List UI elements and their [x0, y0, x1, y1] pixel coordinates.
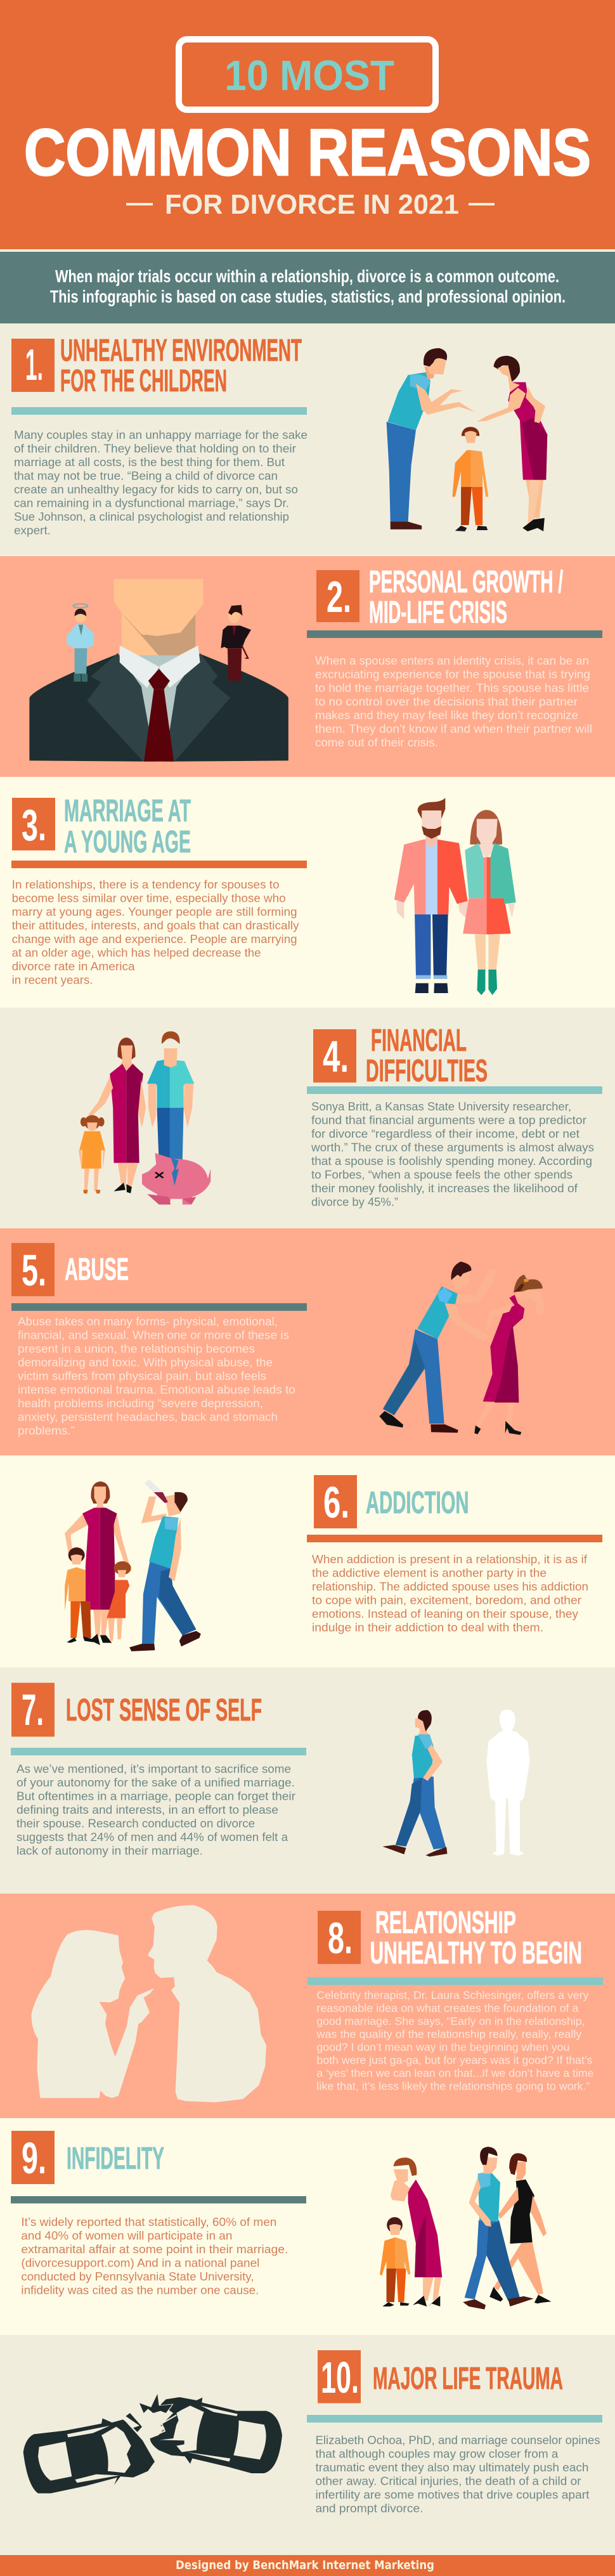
heading: MID-LIFE CRISIS [369, 595, 507, 630]
badge: 10 most: 10 MOST [224, 52, 394, 100]
panel: reason 2 [0, 556, 615, 777]
text block: conducted by Pennsylvania State University, [21, 2270, 254, 2283]
text block: indulge in their addiction to deal with them. [312, 1621, 543, 1634]
number badge 2 [316, 570, 359, 622]
panel: reason 1 [0, 323, 615, 556]
text block: suggests that 24% of men and 44% of women felt a [16, 1830, 288, 1844]
text block: can remaining in a dysfunctional marriage,” says Dr. [14, 496, 289, 510]
number badge 8 [318, 1911, 361, 1964]
text block [12, 878, 299, 987]
heading [369, 565, 563, 630]
text block: divorce rate in America [12, 959, 135, 973]
illustration: infidelity family scene [380, 2147, 551, 2310]
text block: their money foolishly, it increases the likelihood of [311, 1181, 578, 1195]
number badge 9: 9. [22, 2133, 46, 2183]
text block: to Forbes, “when a spouse feels the other spends [311, 1168, 573, 1181]
number badge 7: 7. [22, 1685, 44, 1734]
number badge 4: 4. [323, 1032, 349, 1081]
panel: reason 7 [0, 1667, 615, 1894]
text block: found that financial arguments were a top predictor [311, 1114, 586, 1126]
text block: When addiction is present in a relationship, it is as if [312, 1552, 588, 1566]
text block: Celebrity therapist, Dr. Laura Schlesinger, offers a very [316, 1989, 589, 2001]
text block: both were just ga-ga, but for years was it good? If that’s [316, 2053, 593, 2066]
text block: extramarital affair at some point in their marriage. [21, 2242, 288, 2256]
heading [370, 1906, 582, 1970]
number badge 1: 1. [25, 340, 43, 389]
heading: A YOUNG AGE [64, 825, 191, 859]
text block: present in a union, the relationship becomes [18, 1342, 255, 1355]
text block: lack of autonomy in their marriage. [16, 1844, 203, 1857]
header panel [0, 0, 615, 252]
text block: other away. Critical injuries, the death of a child or [316, 2475, 581, 2487]
text block: problems.” [18, 1424, 75, 1437]
panel: reason 9 [0, 2118, 615, 2335]
text block: good marriage. She says, “Early on in the relationship, [316, 2015, 585, 2027]
text block: As we’ve mentioned, it’s important to sacrifice some [16, 1762, 291, 1776]
text block: demoralizing and toxic. With physical abuse, the [18, 1356, 273, 1369]
text block: their attitudes, interests, and goals that can drastically [12, 918, 299, 932]
panel: reason 8 [0, 1894, 615, 2118]
illustration: crashed cars [23, 2394, 282, 2494]
text block: Sue Johnson, a clinical psychologist and relationship [14, 510, 289, 523]
text block: makes and they may feel like they don’t recognize [315, 708, 578, 722]
illustration: man in suit with angel and devil [29, 579, 288, 762]
text block: financial, and sexual. When one or more of these is [18, 1328, 289, 1342]
number badge 6 [314, 1475, 357, 1528]
intro panel [0, 252, 615, 323]
text block: come out of their crisis. [315, 736, 438, 749]
text block: and prompt divorce. [316, 2501, 424, 2515]
footer [0, 2555, 615, 2576]
number badge 9 [11, 2131, 55, 2184]
text block: infertility are some motives that drive couples apart [316, 2488, 590, 2501]
text block [312, 1552, 588, 1634]
text block: excruciating experience for the spouse that is trying [315, 667, 590, 681]
text block: Abuse takes on many forms- physical, emotional, [18, 1315, 278, 1328]
text block: Sonya Britt, a Kansas State University researcher, [311, 1100, 571, 1113]
heading [60, 334, 302, 398]
heading: RELATIONSHIP [375, 1906, 516, 1940]
text block [21, 2215, 288, 2297]
text block: like that, it’s less likely the relationships going to work.” [316, 2080, 590, 2093]
number badge 8: 8. [328, 1913, 353, 1963]
text block: to hold the marriage together. This spouse has little [315, 681, 589, 694]
text block: a ‘yes’ then we can lean on that...If we don’t have a time [316, 2067, 593, 2079]
text block: them. They don’t know if and when their partner will [315, 722, 592, 736]
heading: FOR THE CHILDREN [60, 364, 227, 398]
text block: that although couples may grow closer from a [316, 2447, 559, 2461]
panel: reason 4 [0, 1008, 615, 1228]
illustration: abuse scene [379, 1261, 545, 1435]
text block: good? I don’t mean way in the beginning when you [316, 2041, 569, 2053]
text block: the addictive element is another party in the [312, 1566, 547, 1579]
illustration: family with broken piggy bank [79, 1031, 210, 1204]
text block: Elizabeth Ochoa, PhD, and marriage counselor opines [316, 2433, 600, 2447]
illustration: young couple [394, 798, 516, 995]
text block: that may not be true. “Being a child of divorce can [14, 469, 278, 482]
text block: of your autonomy for the sake of a unified marriage. [16, 1776, 295, 1789]
text block [14, 428, 308, 537]
text block [18, 1315, 295, 1437]
text block: was the quality of the relationship really, really, really [316, 2028, 582, 2041]
subtitle: FOR DIVORCE IN 2021 [165, 189, 459, 220]
text block: anxiety, persistent headaches, back and stomach [18, 1410, 278, 1423]
text block [315, 654, 592, 749]
number badge 5: 5. [22, 1246, 46, 1295]
heading: FINANCIAL [371, 1024, 467, 1058]
number badge 5 [11, 1243, 55, 1296]
number badge 4 [313, 1029, 356, 1083]
number badge 6: 6. [323, 1478, 349, 1527]
heading: DIFFICULTIES [366, 1054, 488, 1088]
text block: their spouse. Research conducted on divorce [16, 1816, 255, 1830]
text block: marry at young ages. Younger people are still forming [12, 905, 297, 918]
text block: to no control over the decisions that their partner [315, 695, 578, 708]
heading: MARRIAGE AT [64, 794, 191, 828]
text block: health problems including “severe depression, [18, 1396, 263, 1410]
number badge 7 [11, 1683, 55, 1736]
panel: reason 5 [0, 1228, 615, 1455]
heading [366, 1024, 488, 1088]
illustration: family and drinking man [65, 1480, 201, 1651]
panel: reason 10 [0, 2335, 615, 2555]
text block: Many couples stay in an unhappy marriage for the sake [14, 428, 308, 441]
text block: to cope with pain, excitement, boredom, and other [312, 1593, 581, 1607]
text block: divorce by 45%.” [311, 1195, 398, 1209]
text block: that a spouse is foolishly spending money. According [311, 1154, 592, 1168]
text block: at an older age, which has helped decrease the [12, 946, 261, 959]
heading: UNHEALTHY ENVIRONMENT [60, 334, 302, 368]
text block: When a spouse enters an identity crisis, it can be an [315, 654, 589, 667]
text block: in recent years. [12, 973, 93, 987]
number badge 3 [12, 798, 55, 850]
text block: defining traits and interests, in an effort to please [16, 1803, 278, 1816]
heading [64, 794, 191, 859]
text block: marriage at all costs, is the best thing for them. But [14, 455, 285, 469]
panel: reason 6 [0, 1455, 615, 1667]
text block [316, 1989, 593, 2093]
text block: become less similar over time, especially those who [12, 892, 286, 904]
heading: LOST SENSE OF SELF [66, 1693, 262, 1727]
text block: relationship. The addicted spouse uses his addiction [312, 1580, 588, 1593]
text block: It’s widely reported that statistically, 60% of men [21, 2215, 276, 2228]
text block: (divorcesupport.com) And in a national panel [21, 2256, 259, 2269]
number badge 3: 3. [22, 800, 46, 850]
text block: But oftentimes in a marriage, people can forget their [16, 1790, 295, 1802]
illustration: arguing parents and child [387, 348, 547, 531]
text block [316, 2433, 600, 2515]
text block [311, 1100, 594, 1209]
text block: change with age and experience. People are marrying [12, 932, 297, 946]
number badge 2: 2. [327, 572, 351, 621]
text block: worth.” The crux of these arguments is almost always [311, 1140, 594, 1154]
text block: expert. [14, 524, 51, 537]
text block: and 40% of women will participate in an [21, 2228, 232, 2242]
text block: reasonable idea on what creates the foundation of a [316, 2001, 579, 2014]
text block: traumatic event they also may ultimately push each [316, 2461, 588, 2474]
text block: emotions. Instead of leaning on their spouse, they [312, 1607, 579, 1620]
badge: 10 most [179, 39, 436, 110]
text block [16, 1762, 295, 1857]
text block: for divorce “regardless of their income, debt or net [311, 1127, 579, 1140]
number badge 1 [11, 339, 55, 392]
text block: infidelity was cited as the number one cause. [21, 2283, 259, 2297]
number badge 10 [318, 2350, 361, 2404]
illustration: man and white silhouette [382, 1710, 529, 1857]
panel: reason 3 [0, 777, 615, 1008]
heading: INFIDELITY [67, 2142, 164, 2176]
text block: victim suffers from physical pain, but also feels [18, 1369, 266, 1382]
text block: create an unhealthy legacy for kids to carry on, but so [14, 483, 298, 496]
number badge 10: 10. [321, 2353, 359, 2402]
footer: Designed by BenchMark Internet Marketing [176, 2558, 434, 2572]
illustration: arguing couple silhouette [31, 1905, 266, 2102]
text block: intense emotional trauma. Emotional abuse leads to [18, 1382, 295, 1396]
heading: ADDICTION [366, 1486, 469, 1520]
text block: In relationships, there is a tendency for spouses to [12, 878, 280, 891]
text block: of their children. They believe that holding on to their [14, 441, 296, 455]
heading: ABUSE [65, 1252, 129, 1287]
